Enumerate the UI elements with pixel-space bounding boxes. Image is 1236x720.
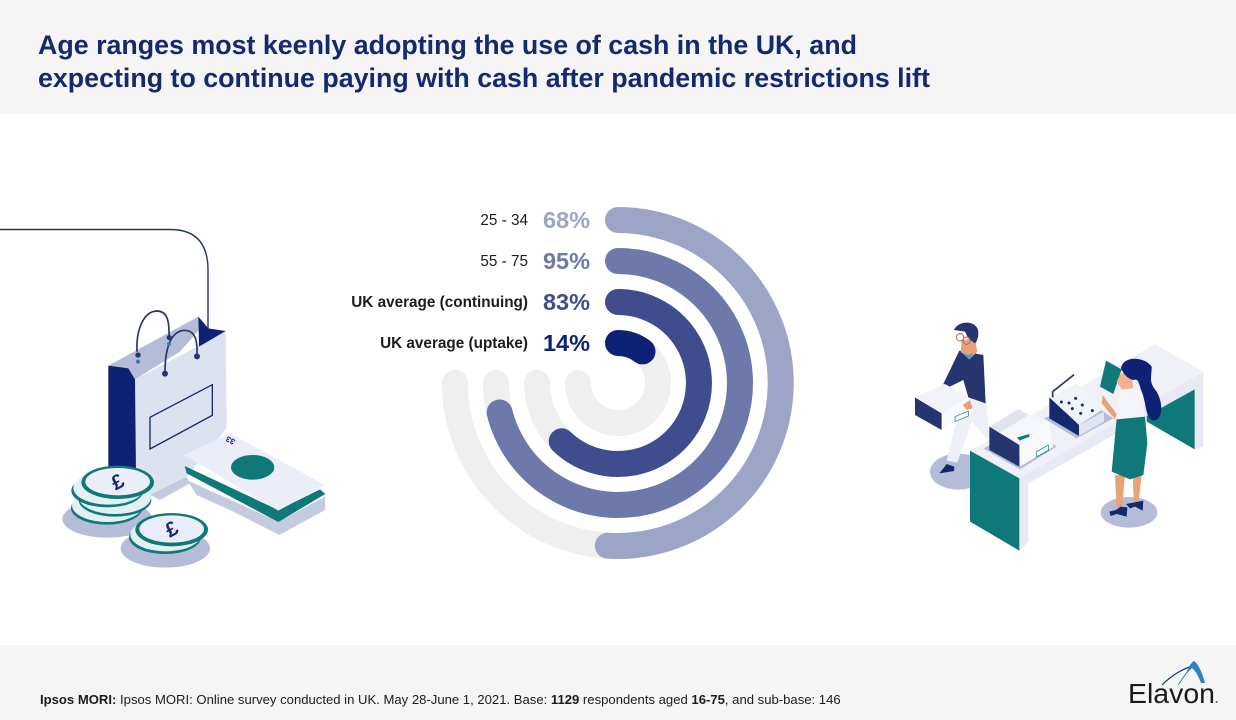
label 25-34: 25 - 34 bbox=[480, 212, 528, 229]
single coins bbox=[121, 513, 210, 568]
bar: UK average uptake 14% bbox=[618, 343, 642, 351]
value 14%: 14% bbox=[543, 330, 590, 356]
bag bbox=[108, 311, 227, 500]
value 95%: 95% bbox=[543, 248, 590, 274]
title bbox=[38, 30, 930, 93]
icon: connector line bbox=[0, 230, 208, 330]
illustration: shopping bag and money bbox=[62, 311, 325, 568]
label 55-75: 55 - 75 bbox=[480, 253, 528, 270]
source note: Ipsos MORI: Ipsos MORI: Online survey conducted in UK. May 28-June 1, 2021. Base: 1129 respondents aged 16-75, and sub-base: 146 bbox=[40, 692, 841, 707]
track rings bbox=[455, 220, 781, 546]
title: Age ranges most keenly adopting the use of cash in the UK, and bbox=[38, 30, 857, 60]
bar: UK average continuing 83% bbox=[562, 302, 699, 464]
banknotes bbox=[184, 433, 325, 535]
floor shadow: woman bbox=[1101, 497, 1157, 528]
bar: 55-75 95% bbox=[500, 261, 740, 505]
footer band bbox=[0, 645, 1236, 720]
banknotes: 33 bbox=[224, 434, 237, 446]
floor shadow: man bbox=[930, 454, 987, 490]
woman cashier bbox=[1100, 359, 1161, 517]
logo: Elavon bbox=[1128, 661, 1218, 709]
cash register bbox=[1049, 375, 1104, 436]
label UK average uptake: UK average (uptake) bbox=[380, 335, 528, 352]
title: expecting to continue paying with cash after pandemic restrictions lift bbox=[38, 63, 930, 93]
man carrying box bbox=[915, 323, 990, 473]
radial bar chart bbox=[455, 220, 781, 546]
coin stack: £ bbox=[107, 469, 129, 495]
value 83%: 83% bbox=[543, 289, 590, 315]
counter bbox=[970, 344, 1203, 551]
chart labels bbox=[351, 207, 590, 356]
parcel on counter bbox=[989, 409, 1053, 467]
header band bbox=[0, 0, 1236, 114]
illustration: shop counter with customer and cashier bbox=[915, 323, 1203, 551]
logo: Elavon: Elavon bbox=[1128, 678, 1215, 709]
coin stack bbox=[62, 466, 154, 538]
value 68%: 68% bbox=[543, 207, 590, 233]
bar: 25-34 68% bbox=[608, 220, 781, 546]
single coins: £ bbox=[161, 516, 183, 542]
label UK average continuing: UK average (continuing) bbox=[351, 294, 528, 311]
